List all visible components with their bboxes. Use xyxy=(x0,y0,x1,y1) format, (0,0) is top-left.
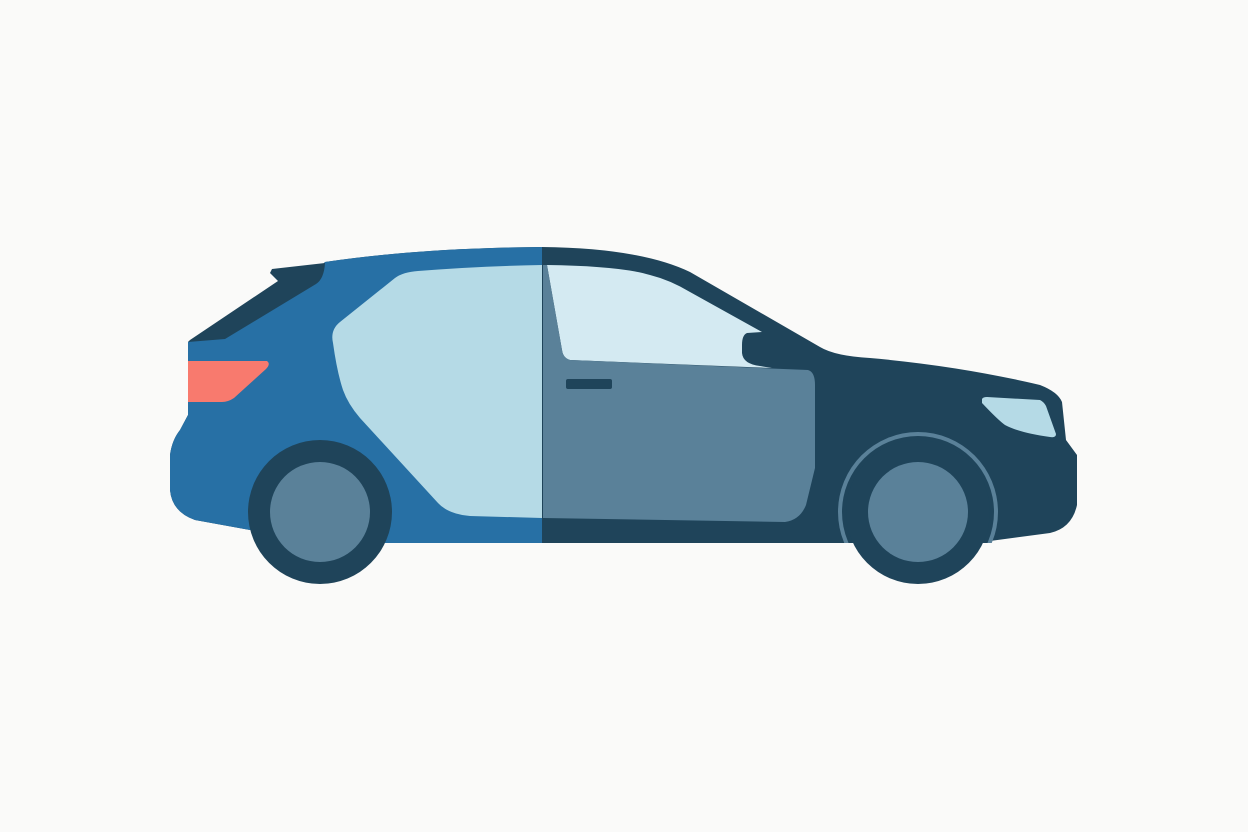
rear wheel xyxy=(248,440,392,584)
illustration: car side view xyxy=(170,247,1077,584)
rear window xyxy=(332,265,542,518)
tail light xyxy=(188,361,269,402)
door xyxy=(543,265,815,522)
car body xyxy=(170,247,1077,543)
front wheel xyxy=(846,440,990,584)
rear spoiler xyxy=(188,263,325,342)
headlight xyxy=(982,397,1056,437)
door handle xyxy=(566,379,612,389)
front window xyxy=(547,265,772,368)
front wheel arch xyxy=(838,432,998,543)
